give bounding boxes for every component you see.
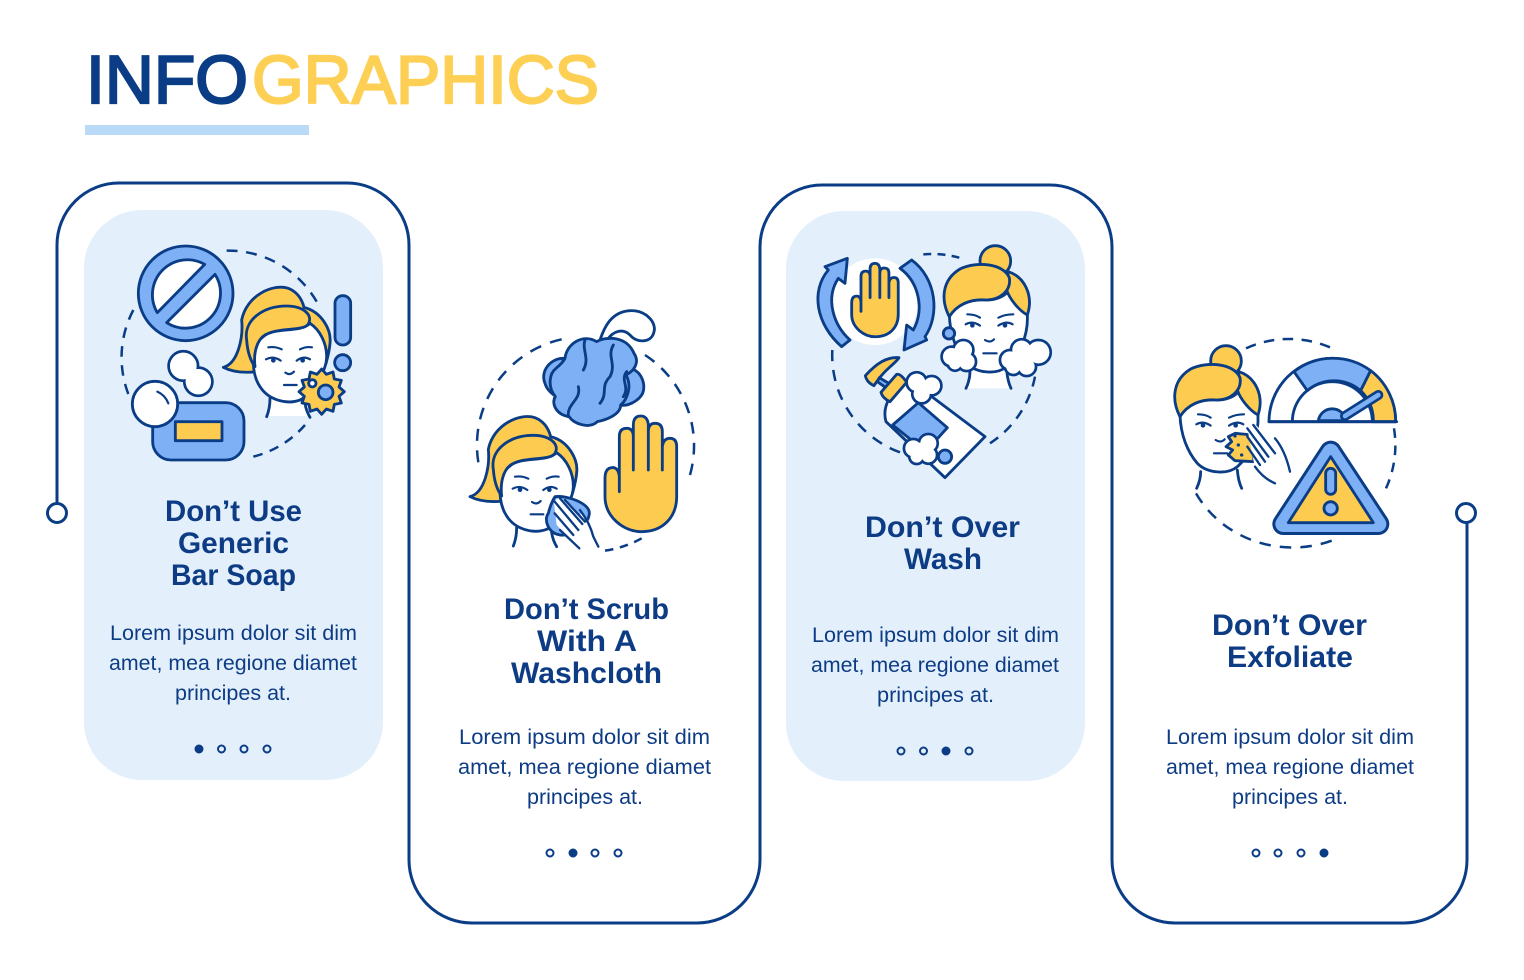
text block: card 2 xyxy=(458,725,711,809)
text block: card 4: principes at. xyxy=(1232,785,1348,809)
text block: card 2: amet, mea regione diamet xyxy=(458,755,711,779)
pagination dots: card 2 xyxy=(546,850,622,856)
text block: card 3 xyxy=(811,623,1059,707)
icon: over exfoliation xyxy=(1175,339,1397,547)
text block: card 4: Lorem ipsum dolor sit dim xyxy=(1166,725,1414,749)
heading: card 2: Don’t Scrub xyxy=(504,593,669,626)
panel: card 1 xyxy=(84,210,383,780)
text block: card 4: amet, mea regione diamet xyxy=(1166,755,1414,779)
pagination dots: card 3 xyxy=(898,748,972,754)
text block: card 1: amet, mea regione diamet xyxy=(109,651,357,675)
heading: card 1: Generic xyxy=(178,527,289,560)
text block: card 1: principes at. xyxy=(175,681,291,705)
heading: card 4: Don’t Over xyxy=(1212,609,1368,642)
heading: card 1: Don’t Use xyxy=(165,495,302,528)
title underline xyxy=(85,125,309,135)
icon: bar soap warning xyxy=(122,246,351,460)
text block: card 3: Lorem ipsum dolor sit dim xyxy=(812,623,1059,647)
heading: card 2 xyxy=(504,593,669,690)
heading: card 2: Washcloth xyxy=(511,657,662,690)
heading: card 1: Bar Soap xyxy=(171,559,296,592)
icon: over washing xyxy=(818,246,1051,478)
title: GRAPHICS xyxy=(252,42,599,118)
heading: card 2: With A xyxy=(537,625,637,658)
card outline connector xyxy=(48,183,1476,923)
title xyxy=(86,42,599,118)
heading: card 3: Wash xyxy=(904,543,982,576)
heading: card 3: Don’t Over xyxy=(865,511,1021,544)
text block: card 4 xyxy=(1166,725,1414,809)
title: INFO xyxy=(86,42,248,118)
panel: card 2 xyxy=(458,311,711,857)
pagination dots: card 1 xyxy=(196,746,270,752)
text block: card 2: Lorem ipsum dolor sit dim xyxy=(459,725,710,749)
heading: card 3 xyxy=(865,511,1021,576)
pagination dots: card 4 xyxy=(1252,850,1328,856)
icon: washcloth scrub xyxy=(470,311,694,551)
text block: card 3: amet, mea regione diamet xyxy=(811,653,1059,677)
text block: card 3: principes at. xyxy=(877,683,994,707)
heading: card 4 xyxy=(1212,609,1368,674)
text block: card 1 xyxy=(109,621,357,705)
heading: card 1 xyxy=(165,495,302,592)
panel: card 4 xyxy=(1166,339,1414,857)
heading: card 4: Exfoliate xyxy=(1227,641,1353,674)
panel: card 3 xyxy=(786,211,1085,781)
text block: card 1: Lorem ipsum dolor sit dim xyxy=(110,621,357,645)
text block: card 2: principes at. xyxy=(527,785,643,809)
